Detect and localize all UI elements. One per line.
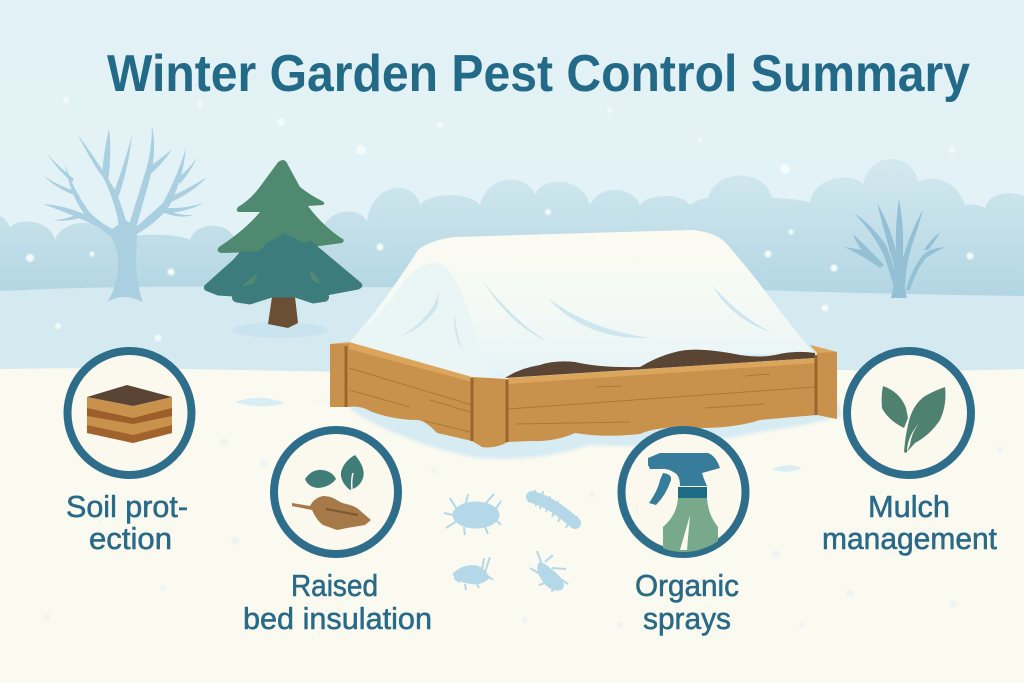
corner post: [472, 377, 508, 447]
left post: [330, 344, 349, 407]
icon ring: [274, 430, 398, 554]
right wall top rail: [508, 358, 817, 384]
label: organic sprays: Organic: [635, 568, 739, 603]
label: soil protection: ection: [89, 521, 172, 556]
label: mulch management: Mulch: [868, 489, 950, 524]
label: raised bed insulation: bed insulation: [243, 601, 432, 636]
spray head: [648, 453, 720, 486]
label: soil protection: [66, 489, 188, 556]
brown leaf: [292, 496, 371, 530]
snow shadow around bed: [308, 399, 842, 459]
trunk: [268, 297, 298, 328]
wood grain lines: [346, 346, 816, 442]
label: mulch management: management: [822, 521, 997, 556]
icon: organic spray bottle: [622, 430, 746, 560]
foreground snow speckles: [44, 438, 1003, 628]
bare tree left: [43, 126, 207, 302]
upright leaf: [341, 455, 364, 490]
lower foliage: [205, 235, 361, 303]
label: mulch management: [822, 489, 997, 556]
aphid: [453, 557, 493, 590]
pest silhouettes: [444, 490, 577, 591]
tree shadow: [232, 322, 328, 338]
left wall top rail: [330, 342, 472, 382]
label: organic sprays: sprays: [643, 601, 731, 636]
icon: raised bed insulation: [274, 430, 398, 554]
label: soil protection: Soil prot-: [66, 489, 188, 524]
evergreen tree: [205, 160, 361, 338]
soil layers: [87, 385, 172, 443]
label: raised bed insulation: Raised: [291, 568, 378, 603]
left leaf: [882, 386, 908, 428]
right wall: [508, 362, 817, 442]
distant snowy hills: [0, 159, 1024, 300]
oval leaf: [305, 470, 336, 488]
spray trigger: [649, 473, 671, 505]
soil: [505, 350, 815, 378]
right post: [810, 345, 837, 419]
beetle: [530, 551, 568, 591]
raised garden bed: [330, 230, 837, 447]
foreground snow: [0, 368, 1024, 683]
icon: soil protection: [68, 351, 192, 475]
right leaf: [904, 387, 945, 453]
title: Winter Garden Pest Control Summary: [107, 45, 970, 103]
mid snow field: [0, 286, 1024, 400]
icon ring: [68, 351, 192, 475]
label: organic sprays: [635, 568, 739, 636]
bare shrub right: [844, 199, 945, 298]
left wall: [349, 348, 472, 441]
icon ring: [622, 430, 746, 554]
bottle body: [663, 498, 718, 552]
icon: mulch leaves: [847, 351, 971, 475]
mite: [444, 494, 501, 535]
larva: [532, 490, 577, 528]
bottle collar: [678, 487, 707, 498]
snowflakes: [26, 97, 974, 342]
cover folds: [400, 280, 772, 350]
snow cover fabric: [349, 230, 815, 378]
label: raised bed insulation: [243, 568, 432, 636]
upper foliage: [218, 160, 344, 253]
icon ring: [847, 351, 971, 475]
